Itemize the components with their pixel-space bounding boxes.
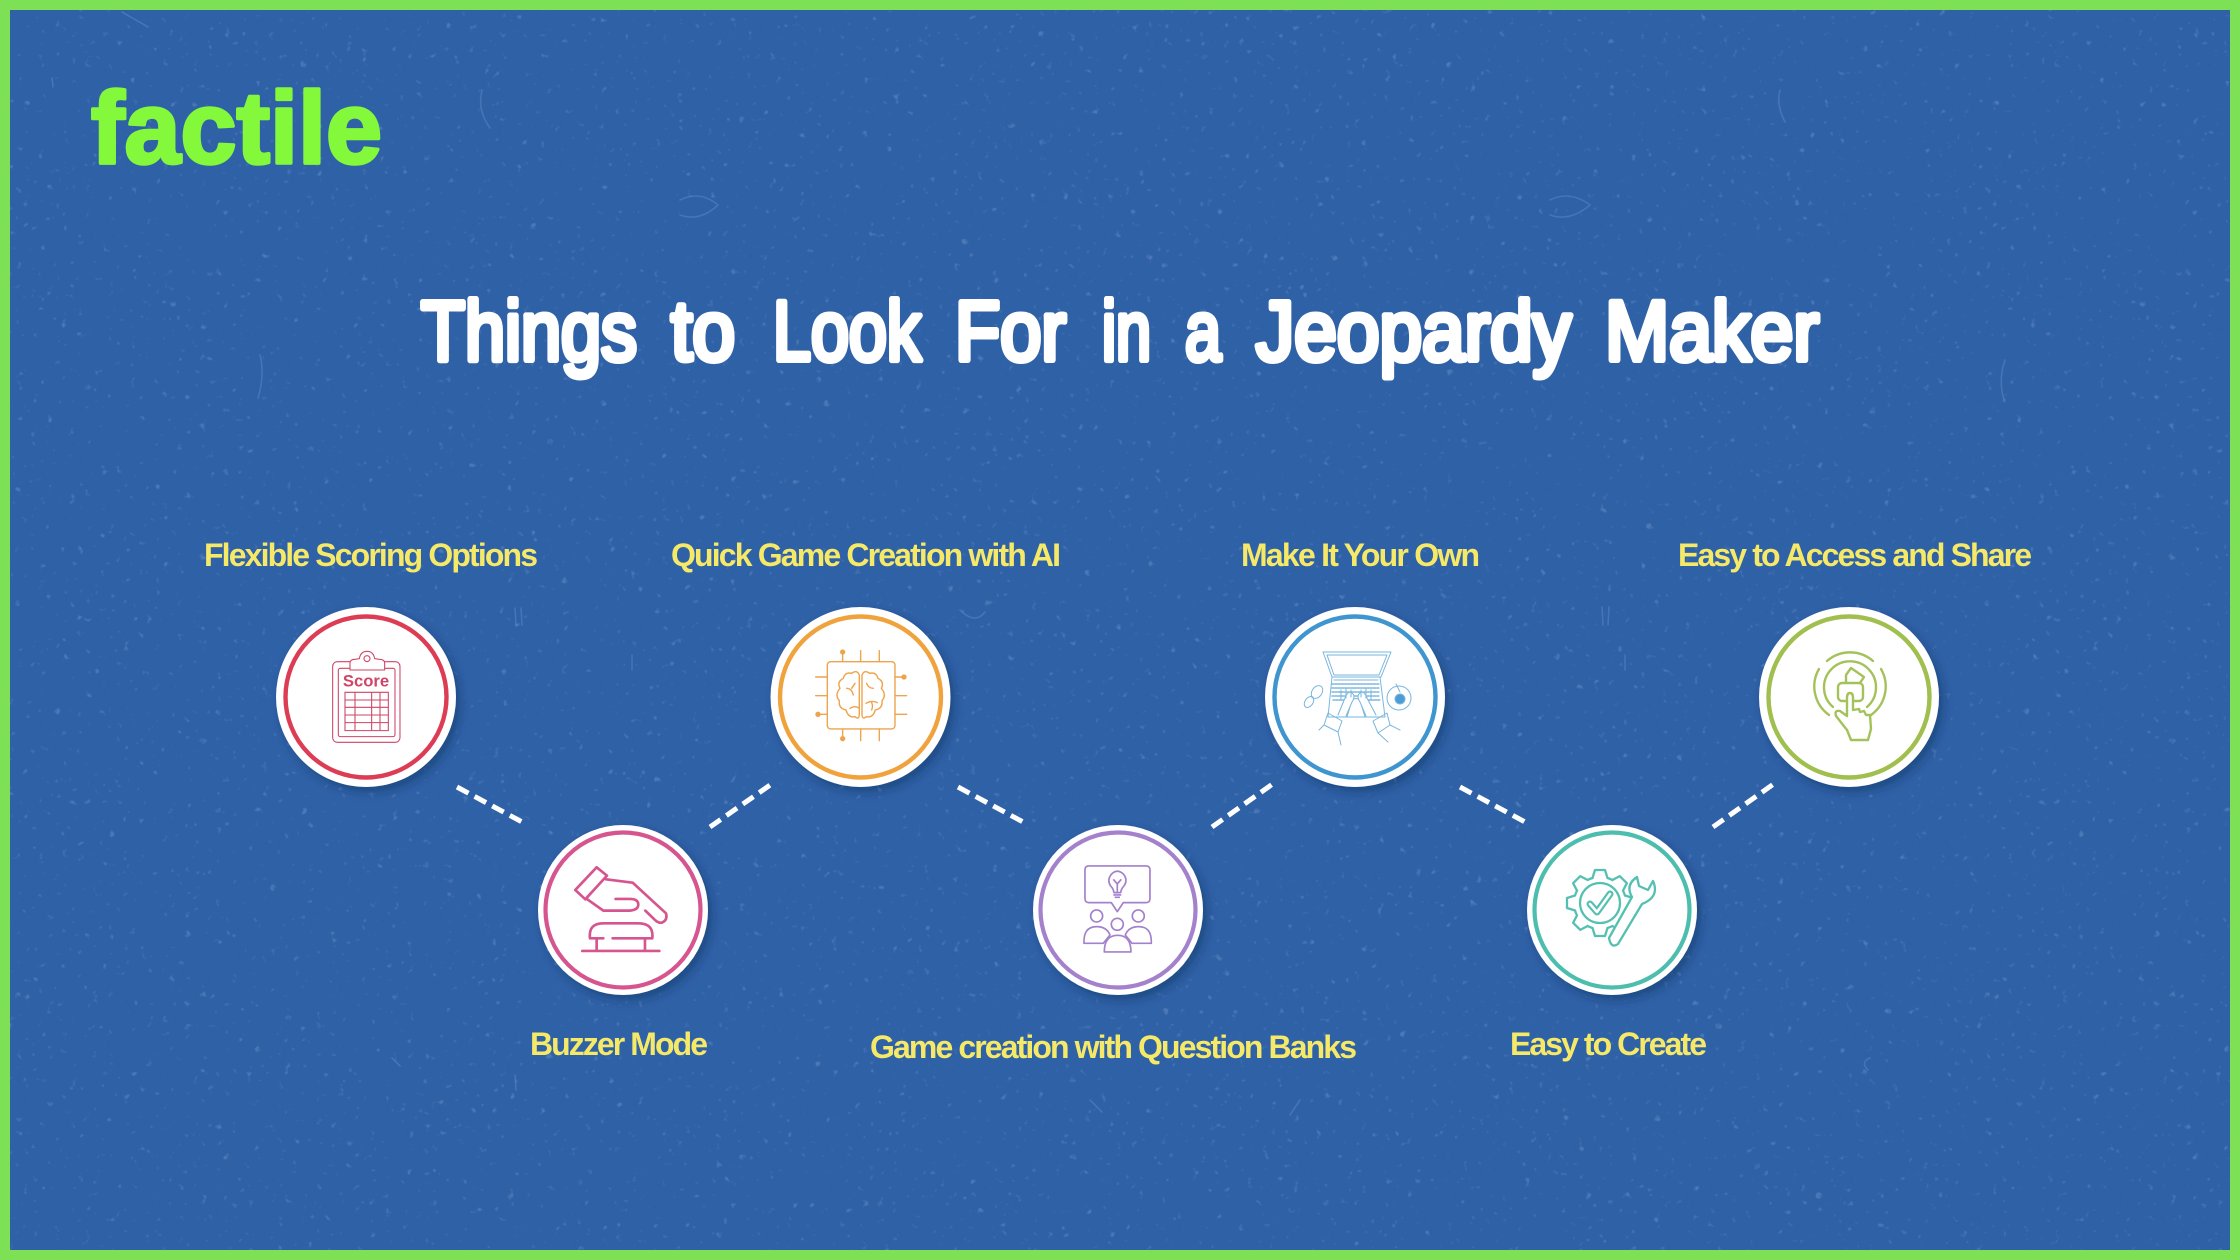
- dashed connectors: [457, 783, 1775, 827]
- node: Quick Game Creation with AI: Quick Game Creation with AI: [671, 537, 1061, 573]
- node: Quick Game Creation with AI: [671, 537, 1061, 787]
- node: Flexible Scoring Options: [204, 537, 538, 787]
- node: Easy to Access and Share: Easy to Access and Share: [1678, 537, 2032, 573]
- node: Easy to Access and Share: [1678, 537, 2032, 787]
- node: Buzzer Mode: [530, 825, 708, 1062]
- node: Easy to Create: [1510, 825, 1707, 1062]
- node: Easy to Create: Easy to Create: [1510, 1026, 1707, 1062]
- icon: finger tapping lock: [1814, 652, 1886, 740]
- title: Things: [421, 284, 637, 378]
- title: to: [671, 284, 735, 378]
- node: Buzzer Mode: Buzzer Mode: [530, 1026, 708, 1062]
- icon: score clipboard: [333, 651, 400, 742]
- icon: group with idea bubble: [1084, 866, 1151, 952]
- node: Flexible Scoring Options: Flexible Scoring Options: [204, 537, 538, 573]
- title: in: [1102, 284, 1151, 378]
- icon: laptop and hands: [1302, 652, 1411, 745]
- logo: factile: factile: [91, 71, 382, 185]
- title: For: [955, 284, 1066, 378]
- icon: score clipboard: Score: [343, 672, 389, 691]
- node: Make It Your Own: Make It Your Own: [1241, 537, 1480, 573]
- icon: hand on buzzer: [575, 867, 666, 951]
- title: a: [1185, 284, 1221, 378]
- node: Make It Your Own: [1241, 537, 1480, 787]
- title: Look: [773, 284, 922, 378]
- title: Maker: [1605, 284, 1819, 378]
- icon: gear and wrench: [1567, 870, 1655, 946]
- node: Game creation with Question Banks: Game creation with Question Banks: [870, 1029, 1357, 1065]
- node: Game creation with Question Banks: [870, 825, 1357, 1065]
- icon: AI brain chip: [815, 649, 907, 741]
- title: Jeopardy: [1256, 284, 1571, 378]
